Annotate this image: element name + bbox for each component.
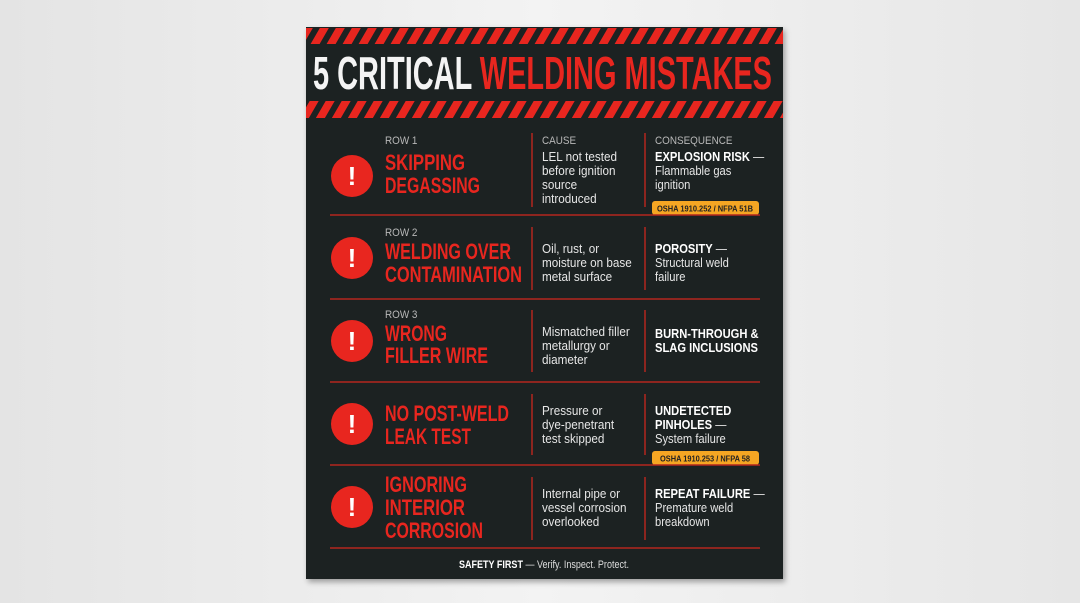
- row 4: dye-penetrant: [542, 417, 615, 432]
- row 4: OSHA 1910.253 / NFPA 58: [660, 454, 750, 464]
- heading: SKIPPING: [385, 150, 465, 175]
- row 3: [331, 310, 759, 372]
- row 4: —: [712, 417, 727, 432]
- row 2: WELDING OVER: [385, 239, 511, 264]
- row 1: ROW 1: [385, 136, 418, 147]
- row 1: [331, 133, 765, 215]
- row 3: FILLER WIRE: [385, 343, 488, 368]
- row 5: —: [750, 486, 765, 501]
- title: 5 CRITICAL WELDING MISTAKES: [313, 47, 772, 99]
- row 5: Internal pipe or: [542, 486, 620, 501]
- row 3: metallurgy or: [542, 338, 610, 353]
- row 4: !: [348, 409, 356, 439]
- row 2: [331, 227, 729, 290]
- row 5: vessel corrosion: [542, 500, 627, 515]
- row 2: Oil, rust, or: [542, 241, 599, 256]
- row 5: [331, 472, 765, 543]
- row 3: BURN-THROUGH &: [655, 326, 759, 341]
- row 4: NO POST-WELD: [385, 401, 509, 426]
- row 4: UNDETECTED: [655, 403, 732, 418]
- row 2: ROW 2: [385, 228, 418, 239]
- row 5: CORROSION: [385, 518, 483, 543]
- row 2: failure: [655, 269, 686, 284]
- cause text: LEL not tested: [542, 149, 617, 164]
- row 2: metal surface: [542, 269, 612, 284]
- row 2: —: [713, 241, 728, 256]
- cause text: source: [542, 177, 577, 192]
- row 5: REPEAT FAILURE: [655, 486, 750, 501]
- consequence text: EXPLOSION RISK: [655, 149, 750, 164]
- badge: OSHA 1910.252 / NFPA 51B: [657, 204, 753, 214]
- row 2: Structural weld: [655, 255, 729, 270]
- row 5: breakdown: [655, 514, 710, 529]
- row 1: CONSEQUENCE: [655, 136, 733, 147]
- poster panel: [306, 27, 783, 579]
- icon: alert: [331, 155, 373, 197]
- row 4: test skipped: [542, 431, 605, 446]
- row 4: [331, 394, 759, 465]
- row 5: INTERIOR: [385, 495, 465, 520]
- badge: [652, 201, 759, 215]
- footer: SAFETY FIRST — Verify. Inspect. Protect.: [459, 559, 629, 571]
- row 3: Mismatched filler: [542, 324, 630, 339]
- icon: alert: !: [348, 161, 356, 191]
- consequence text: Flammable gas: [655, 163, 731, 178]
- heading: [385, 150, 480, 198]
- heading: DEGASSING: [385, 173, 480, 198]
- row 3: ROW 3: [385, 310, 418, 321]
- row 5: Premature weld: [655, 500, 733, 515]
- row 2: !: [348, 243, 356, 273]
- row 4: PINHOLES: [655, 417, 712, 432]
- row 4: LEAK TEST: [385, 424, 471, 449]
- row 1: CAUSE: [542, 136, 576, 147]
- consequence text: —: [750, 149, 765, 164]
- row 3: WRONG: [385, 321, 447, 346]
- row 3: diameter: [542, 352, 587, 367]
- row 5: !: [348, 492, 356, 522]
- row 2: CONTAMINATION: [385, 262, 522, 287]
- row 2: POROSITY: [655, 241, 713, 256]
- row 3: !: [348, 326, 356, 356]
- consequence text: ignition: [655, 177, 690, 192]
- row 5: IGNORING: [385, 472, 467, 497]
- row 3: SLAG INCLUSIONS: [655, 340, 758, 355]
- row 2: moisture on base: [542, 255, 632, 270]
- cause text: before ignition: [542, 163, 616, 178]
- row 4: System failure: [655, 431, 726, 446]
- row 5: overlooked: [542, 514, 599, 529]
- cause text: introduced: [542, 191, 597, 206]
- row 4: Pressure or: [542, 403, 602, 418]
